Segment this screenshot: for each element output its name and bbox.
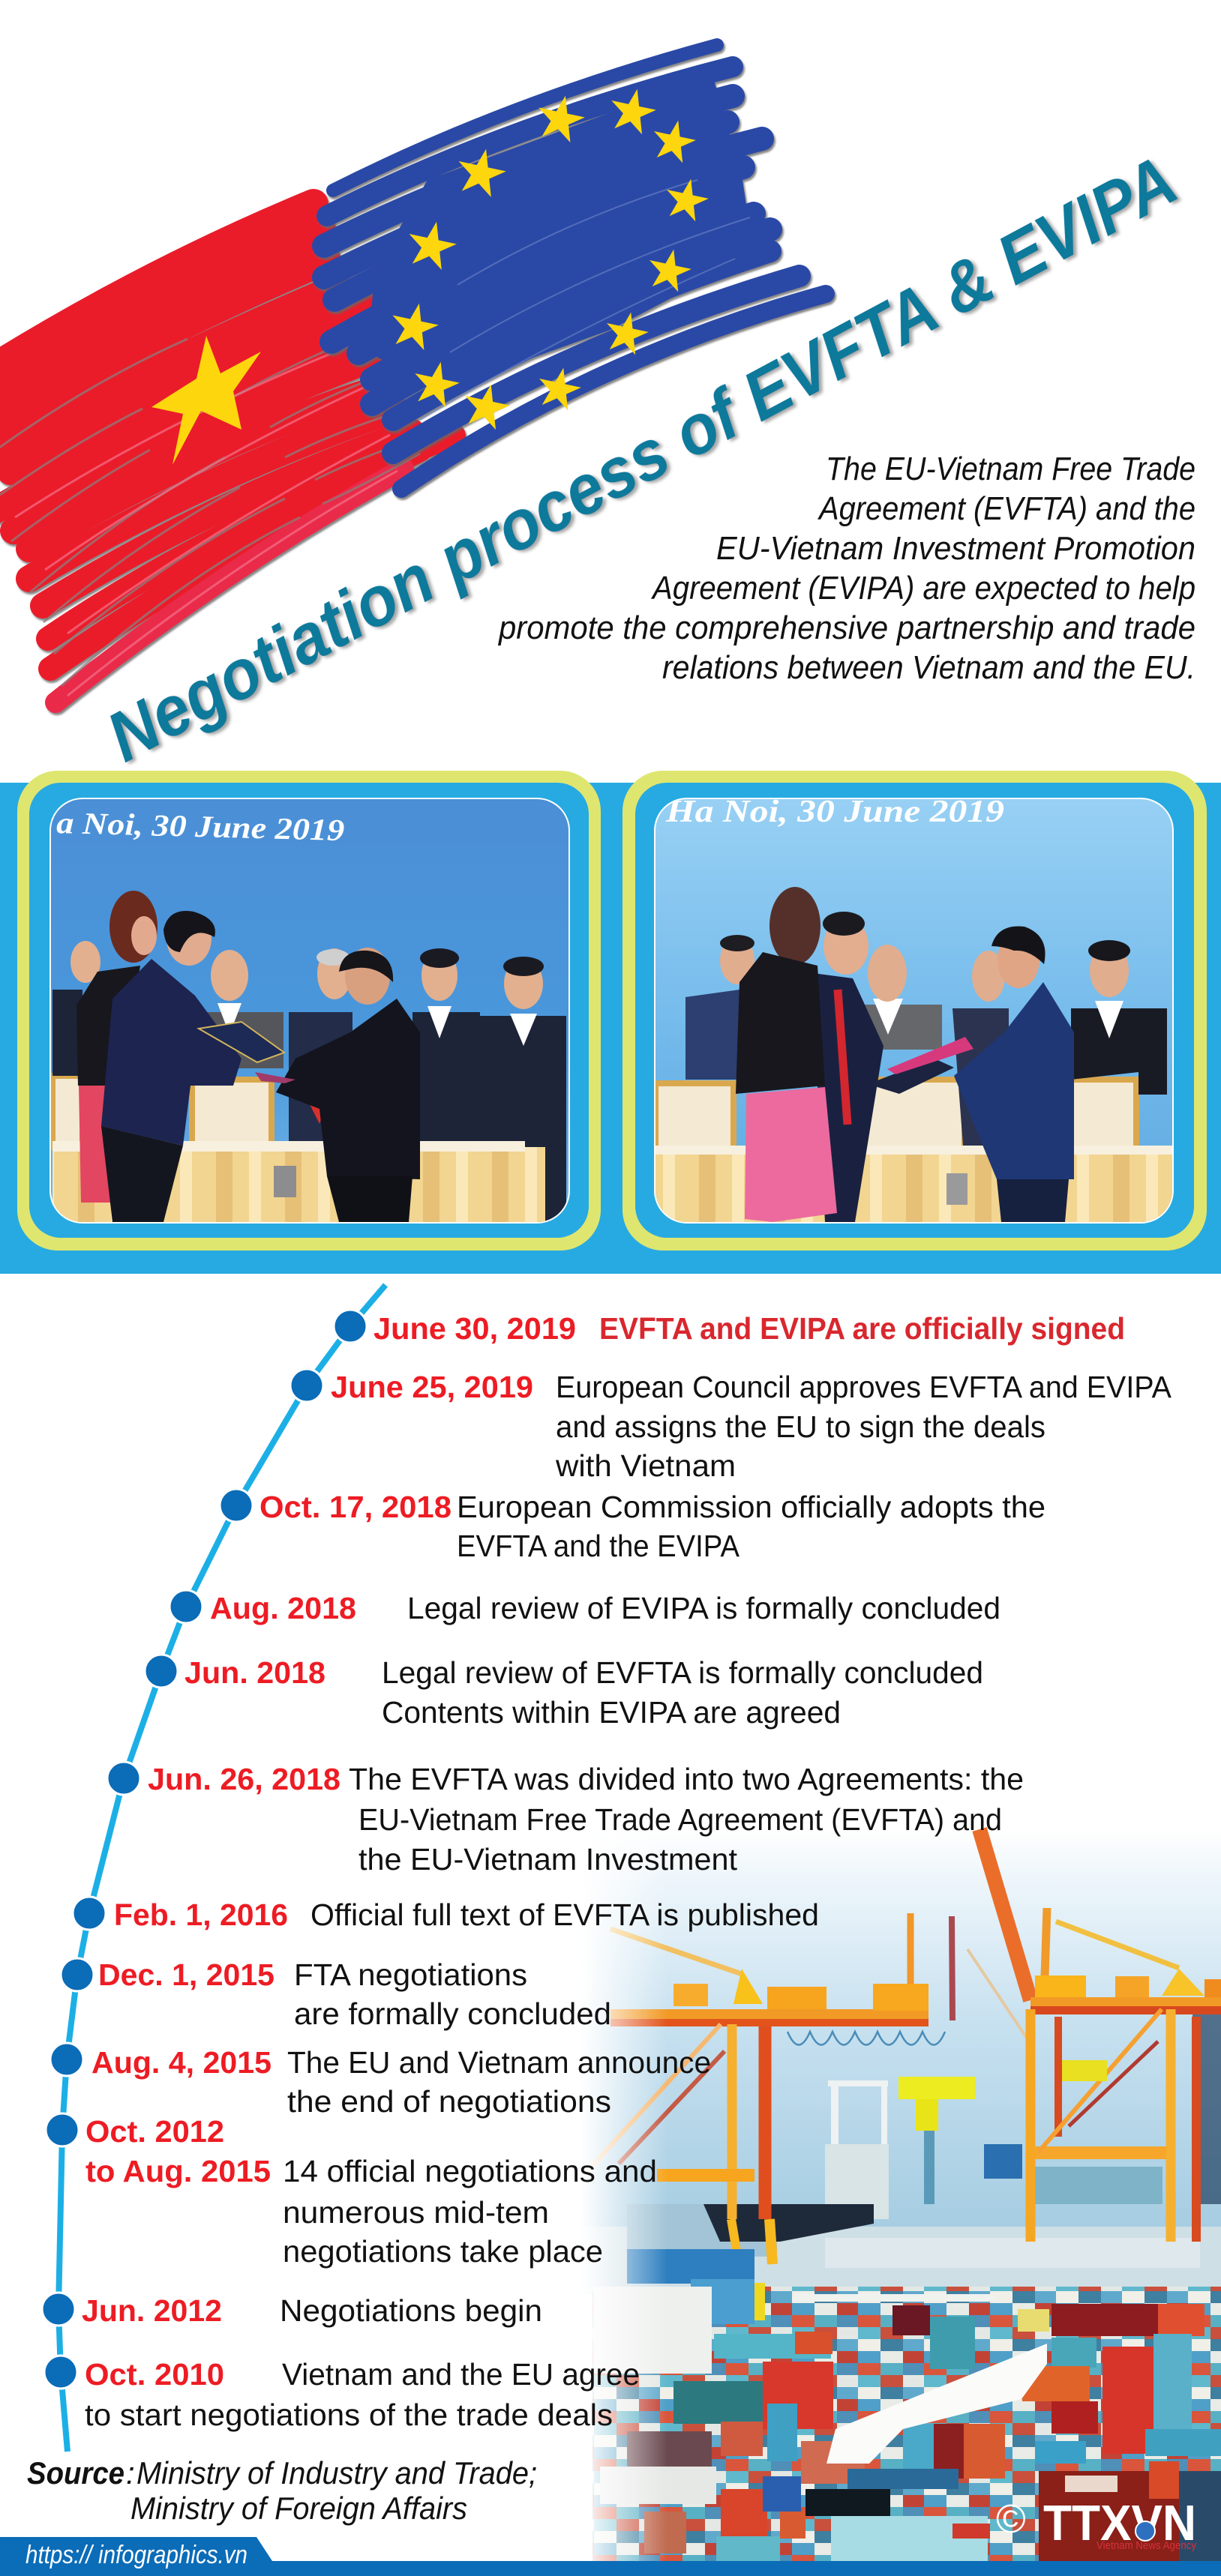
right signing photo — [656, 795, 1172, 1222]
red stroke separators — [0, 330, 420, 686]
entry: Oct. 17, 2018: European Commission officially adopts the — [457, 1490, 1046, 1524]
intro text block: relations between Vietnam and the EU. — [662, 649, 1196, 686]
entry: June 30, 2019 — [334, 1310, 1125, 1346]
source note — [27, 2455, 537, 2526]
entry: Oct. 2010: to start negotiations of the trade deals — [85, 2398, 613, 2432]
entry: Oct. 2012 to Aug. 2015: Oct. 2012 — [86, 2114, 224, 2149]
entry: June 25, 2019: and assigns the EU to sign the deals — [556, 1409, 1046, 1444]
watermark: TTXVN logo: TTXVN — [1043, 2495, 1196, 2551]
entry: Aug. 4, 2015 — [50, 2043, 711, 2119]
entry: Oct. 2012 to Aug. 2015 — [46, 2113, 657, 2269]
entry: Dec. 1, 2015: Dec. 1, 2015 — [98, 1957, 274, 1992]
panel: left photo frame — [17, 771, 601, 1251]
entry: Aug. 2018: Aug. 2018 — [210, 1591, 356, 1625]
source note: Ministry of Foreign Affairs — [130, 2491, 467, 2526]
source note: : — [126, 2455, 135, 2491]
entry: Jun. 26, 2018: The EVFTA was divided into two Agreements: the — [349, 1762, 1024, 1796]
shipping containers — [592, 2249, 1221, 2561]
fade to white over port photo — [581, 1829, 668, 2564]
entry: Oct. 2010: Oct. 2010 — [85, 2357, 224, 2392]
right signing photo: Ha Noi, 30 June 2019 — [665, 795, 1004, 829]
entry: Oct. 2010: Vietnam and the EU agree — [282, 2357, 640, 2392]
entry: June 30, 2019: EVFTA and EVIPA are officially signed — [599, 1311, 1125, 1346]
source note: Ministry of Industry and Trade; — [136, 2455, 537, 2491]
left signing photo: a Noi, 30 June 2019 — [56, 805, 345, 847]
entry: Jun. 26, 2018: EU-Vietnam Free Trade Agreement (EVFTA) and — [358, 1802, 1002, 1837]
entry: Aug. 2018: Legal review of EVIPA is formally concluded — [407, 1591, 1000, 1625]
intro text block: promote the comprehensive partnership and trade — [497, 610, 1196, 646]
entry: Oct. 2012 to Aug. 2015: 14 official negotiations and — [283, 2154, 657, 2188]
entry: Jun. 2012: Negotiations begin — [280, 2293, 542, 2328]
intro text block: EU-Vietnam Investment Promotion — [716, 530, 1196, 567]
entry: Dec. 1, 2015: FTA negotiations — [294, 1957, 527, 1992]
entry: Feb. 1, 2016: Official full text of EVFTA is published — [310, 1898, 819, 1932]
flag illustration: Vietnam and EU brush strokes — [0, 45, 826, 702]
entry: Dec. 1, 2015 — [61, 1957, 611, 2031]
entry: Dec. 1, 2015: are formally concluded — [294, 1996, 611, 2031]
EU flag yellow stars — [387, 84, 712, 432]
Vietnam flag big yellow star — [152, 336, 261, 465]
entry: June 25, 2019 — [290, 1369, 1172, 1483]
entry: Jun. 2018: Contents within EVIPA are agreed — [382, 1695, 841, 1730]
entry: Jun. 2018 — [145, 1655, 983, 1730]
watermark: TTXVN logo: Vietnam News Agency — [1096, 2539, 1196, 2552]
ship — [704, 2080, 1162, 2242]
entry: Aug. 2018 — [170, 1590, 1000, 1625]
entry: Aug. 4, 2015: the end of negotiations — [287, 2084, 611, 2119]
footer bar with URL: https:// infographics.vn — [26, 2541, 248, 2569]
blue photo band — [0, 771, 1221, 1274]
entry: June 25, 2019: June 25, 2019 — [331, 1370, 533, 1404]
entry: June 25, 2019: European Council approves EVFTA and EVIPA — [556, 1370, 1172, 1404]
left crane — [580, 1913, 1028, 2264]
footer bar with URL — [0, 2537, 1221, 2576]
right crane — [980, 1829, 1221, 2242]
entry: Jun. 2012 — [42, 2293, 542, 2328]
timeline spine — [58, 1285, 386, 2452]
entry: June 30, 2019: June 30, 2019 — [374, 1311, 576, 1346]
intro text block — [497, 451, 1196, 686]
left signing photo — [51, 799, 568, 1222]
entry: Jun. 2018: Jun. 2018 — [184, 1655, 326, 1690]
EU flag blue strokes — [324, 45, 826, 489]
entry: Oct. 2012 to Aug. 2015: numerous mid-tem — [283, 2195, 549, 2230]
entry: Jun. 26, 2018 — [107, 1762, 1024, 1877]
entry: Oct. 2010 — [44, 2356, 640, 2432]
entry: Feb. 1, 2016 — [73, 1897, 819, 1932]
entry: Aug. 4, 2015: Aug. 4, 2015 — [92, 2045, 272, 2080]
Vietnam flag red strokes — [0, 204, 454, 702]
entry: Oct. 2012 to Aug. 2015: to Aug. 2015 — [86, 2154, 271, 2188]
entry: Feb. 1, 2016: Feb. 1, 2016 — [114, 1898, 288, 1932]
timeline entries — [42, 1285, 1172, 2452]
entry: Jun. 2012: Jun. 2012 — [82, 2293, 222, 2328]
entry: Oct. 17, 2018 — [220, 1489, 1046, 1563]
port photo: cranes and containers — [525, 1822, 1221, 2564]
watermark: TTXVN logo: © — [996, 2497, 1026, 2542]
entry: Jun. 26, 2018: the EU-Vietnam Investment — [358, 1842, 738, 1877]
entry: June 25, 2019: with Vietnam — [555, 1448, 736, 1483]
entry: Oct. 2012 to Aug. 2015: negotiations take place — [283, 2234, 603, 2269]
entry: Jun. 26, 2018: Jun. 26, 2018 — [148, 1762, 340, 1796]
white margin left of port photo — [525, 1822, 581, 2564]
entry: Jun. 2018: Legal review of EVFTA is formally concluded — [382, 1655, 983, 1690]
entry: Aug. 4, 2015: The EU and Vietnam announce — [287, 2045, 711, 2080]
entry: Oct. 17, 2018: Oct. 17, 2018 — [260, 1490, 452, 1524]
entry: Oct. 17, 2018: EVFTA and the EVIPA — [457, 1529, 740, 1563]
panel: right photo frame — [622, 771, 1207, 1251]
source note: Source — [27, 2455, 124, 2491]
